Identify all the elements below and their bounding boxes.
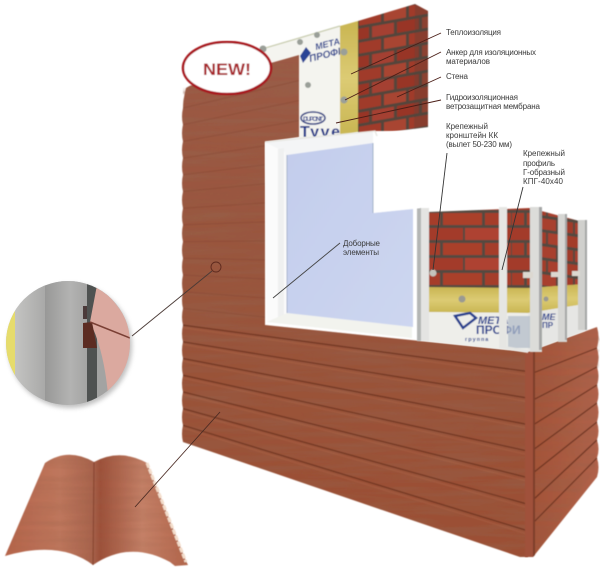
label: anchor: Анкер для изоляционных [446, 48, 536, 57]
label: trim elements: элементы [343, 248, 379, 257]
label: anchor: материалов [446, 57, 490, 66]
brick wall [358, 4, 428, 136]
label: profile [523, 149, 565, 186]
membrane logo: МЕ [542, 312, 556, 322]
NEW badge: NEW! [203, 60, 251, 79]
label: bracket: (вылет 50-230 мм) [446, 140, 512, 149]
metal profiles [417, 207, 587, 353]
brackets [523, 271, 580, 278]
membrane logo: ПРОФИ [476, 323, 521, 337]
membrane logo: группа [465, 337, 489, 343]
label: bracket: Крепежный [446, 122, 488, 131]
label: trim elements: Доборные [343, 239, 381, 248]
NEW badge [183, 42, 271, 94]
membrane logo text [300, 38, 341, 64]
siding profile panel sample [4, 454, 188, 567]
label: profile: профиль [523, 159, 555, 168]
leader lines [132, 33, 523, 507]
label: trim elements [343, 239, 381, 257]
Tyvek text [300, 112, 340, 141]
insulation band [424, 287, 528, 313]
membrane logo [455, 312, 556, 343]
membrane sheet with logo [265, 25, 341, 138]
label: membrane [446, 93, 541, 111]
inset: siding lock detail [6, 281, 134, 410]
anchor heads [430, 270, 548, 302]
main siding wall, left face [180, 27, 530, 560]
membrane logo text: МЕТА [314, 36, 341, 52]
membrane logo text: ПРОФИ [308, 45, 347, 65]
window glass [287, 143, 413, 327]
Tyvek text: DUPONT [303, 116, 323, 123]
label: profile: Крепежный [523, 149, 565, 158]
brick rows [428, 208, 530, 288]
label: anchor [446, 48, 536, 66]
corner trim [525, 350, 533, 557]
window with additional trim elements [265, 131, 420, 338]
label: profile: КПГ-40х40 [523, 177, 564, 186]
insulation strip [340, 21, 358, 136]
labels [343, 28, 565, 257]
membrane logo: ПР [542, 321, 554, 330]
label: bracket: кронштейн КК [446, 131, 498, 140]
label: profile: Г-образный [523, 168, 565, 177]
label: membrane: ветрозащитная мембрана [446, 102, 541, 111]
label: membrane: Гидроизоляционная [446, 93, 518, 102]
upper wall cut-out: membrane, insulation and brick [260, 4, 428, 141]
nailing strip [147, 463, 186, 562]
window frame [265, 131, 412, 338]
membrane band [424, 312, 528, 352]
siding wall, right face [525, 325, 600, 560]
siding board seams [183, 325, 527, 530]
Tyvek text: Tyve [300, 124, 340, 141]
lower wall cut-out: brick, insulation, membrane and profiles [417, 207, 587, 353]
label: thermal insulation: Теплоизоляция [446, 28, 501, 37]
anchors [260, 32, 348, 104]
label: bracket [446, 122, 512, 149]
label: wall: Стена [446, 72, 469, 81]
membrane logo: МЕТА [478, 315, 509, 327]
